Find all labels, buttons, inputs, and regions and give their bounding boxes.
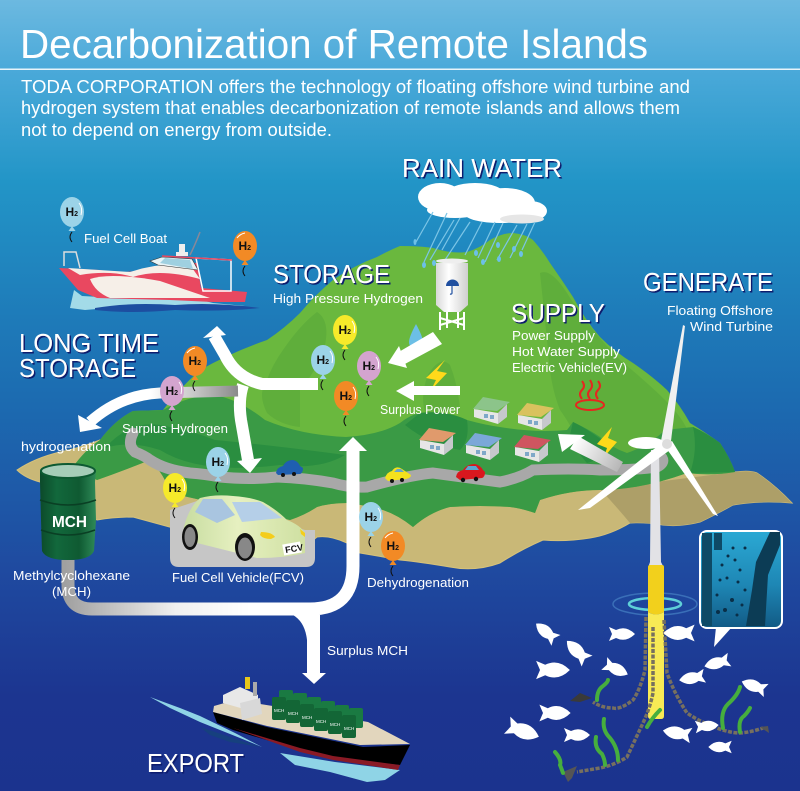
FCV plate bbox=[282, 542, 302, 555]
section headings bbox=[19, 259, 773, 778]
balloon: FCV blue bbox=[206, 447, 230, 492]
red car bbox=[456, 464, 485, 482]
water storage tank bbox=[436, 258, 468, 330]
car body bbox=[182, 495, 305, 558]
label: floating offshore wind turbine bbox=[667, 303, 773, 334]
balloon: boat orange: H2 bbox=[238, 239, 251, 253]
fuel cell boat bbox=[59, 232, 260, 312]
label: surplus power: Surplus Power bbox=[380, 402, 461, 417]
drums on deck: MCH bbox=[288, 711, 298, 716]
balloon: storage blue bbox=[311, 345, 335, 390]
rain lines bbox=[416, 212, 535, 262]
mid green slope shades bbox=[540, 272, 691, 463]
arrow: hydrogen to fuel cell boat bbox=[203, 326, 318, 384]
heading: export: EXPORT bbox=[147, 748, 244, 778]
cabin bbox=[150, 257, 198, 270]
intro text: hydrogen system that enables decarbonization of remote islands and allows them bbox=[21, 98, 680, 118]
balloon: storage blue: H2 bbox=[316, 353, 329, 367]
houses bbox=[419, 397, 554, 462]
arrow: surplus power to storage bbox=[396, 381, 460, 401]
balloon: boat orange bbox=[233, 231, 257, 276]
arrow: hydrogen to FCV bbox=[237, 385, 262, 473]
arrow: turbine to supply bbox=[558, 434, 623, 472]
label: floating offshore wind turbine: Wind Turbine bbox=[690, 319, 773, 334]
heading: supply: SUPPLY bbox=[511, 298, 605, 328]
label: methylcyclohexane: Methylcyclohexane bbox=[13, 568, 130, 583]
wheels bbox=[182, 524, 198, 550]
label: dehydrogenation: Dehydrogenation bbox=[367, 575, 469, 590]
hot spring icon bbox=[576, 380, 604, 410]
heading: long time storage line 2: STORAGE bbox=[19, 353, 136, 383]
house: red roof bbox=[514, 435, 551, 462]
balloon: boat blue bbox=[60, 197, 84, 242]
arrow: surplus hydrogen to long time storage bbox=[78, 391, 238, 432]
label: hydrogenation: hydrogenation bbox=[21, 439, 111, 454]
heading: long time storage: LONG TIME bbox=[19, 328, 159, 358]
mooring chains bbox=[577, 617, 763, 772]
label: methylcyclohexane bbox=[13, 568, 130, 599]
lightning bolt: wind supply bbox=[597, 427, 617, 457]
underwater photo callout bbox=[700, 531, 782, 647]
rain water heading: RAIN WATER bbox=[402, 153, 562, 183]
hull bbox=[213, 712, 410, 765]
balloon: dehydrogenation orange: H2 bbox=[386, 539, 399, 553]
balloon: FCV yellow: H2 bbox=[168, 481, 181, 495]
balloon: storage purple: H2 bbox=[362, 359, 375, 373]
balloon: surplus orange bbox=[183, 346, 207, 391]
water ripples bbox=[613, 593, 697, 615]
water drop icon bbox=[409, 324, 423, 349]
arrow: MCH line to storage and export bbox=[68, 437, 367, 684]
label: surplus hydrogen: Surplus Hydrogen bbox=[122, 421, 228, 436]
house: yellow roof bbox=[517, 403, 554, 430]
spray bbox=[70, 290, 245, 310]
MCH drum bbox=[40, 464, 96, 560]
title: Decarbonization of Remote Islands bbox=[20, 21, 648, 67]
heading: storage: STORAGE bbox=[273, 259, 390, 289]
balloon: FCV yellow bbox=[163, 473, 187, 518]
white flow arrows bbox=[68, 326, 623, 684]
balloon: storage yellow bbox=[333, 315, 357, 360]
drums on deck bbox=[272, 690, 363, 738]
deck bbox=[213, 700, 410, 745]
export ship bbox=[150, 677, 410, 782]
label: methylcyclohexane: (MCH) bbox=[52, 584, 91, 599]
house: green roof bbox=[473, 397, 510, 424]
house: blue roof bbox=[465, 433, 502, 460]
label: supply items bbox=[512, 328, 627, 375]
label: surplus MCH: Surplus MCH bbox=[327, 643, 408, 658]
fish school bbox=[504, 618, 769, 753]
car pad and fuel cell vehicle bbox=[170, 495, 315, 567]
balloon: dehydrogenation blue bbox=[359, 502, 383, 547]
sand beach bbox=[17, 440, 792, 569]
dark green lower band bbox=[73, 395, 735, 527]
label: supply items: Power Supply bbox=[512, 328, 596, 343]
drums on deck: MCH bbox=[316, 719, 326, 724]
headlight bbox=[260, 532, 275, 539]
house: orange roof bbox=[419, 428, 456, 455]
tower bbox=[648, 450, 664, 568]
bridge bbox=[223, 687, 258, 713]
rain cloud bbox=[414, 183, 547, 268]
drums on deck: MCH bbox=[344, 726, 354, 731]
lightning bolt: surplus power bbox=[426, 360, 447, 390]
car pad and fuel cell vehicle: FCV bbox=[284, 542, 304, 555]
label: fuel cell boat: Fuel Cell Boat bbox=[84, 231, 167, 246]
blades bbox=[661, 325, 685, 441]
concrete pad bbox=[170, 500, 315, 567]
island bbox=[17, 233, 792, 569]
yellow car bbox=[385, 467, 411, 483]
balloon: dehydrogenation blue: H2 bbox=[364, 510, 377, 524]
balloon: surplus purple: H2 bbox=[166, 384, 178, 398]
drums on deck: MCH bbox=[330, 722, 340, 727]
label: fuel cell vehicle: Fuel Cell Vehicle(FCV) bbox=[172, 570, 304, 585]
balloon: boat blue: H2 bbox=[66, 205, 78, 219]
label: supply items: Hot Water Supply bbox=[512, 344, 621, 359]
cars on road bbox=[276, 460, 485, 483]
label: floating offshore wind turbine: Floating Offshore bbox=[667, 303, 773, 318]
hydrogen balloons bbox=[60, 197, 405, 576]
seaweed bbox=[555, 680, 750, 773]
label: high pressure hydrogen: High Pressure Hydrogen bbox=[273, 291, 423, 306]
drums on deck: MCH bbox=[302, 715, 312, 720]
arrow: rain water to storage bbox=[388, 332, 442, 368]
green hillside bbox=[73, 233, 735, 527]
intro text: TODA CORPORATION offers the technology of floating offshore wind turbine and bbox=[21, 77, 690, 97]
component labels bbox=[13, 231, 773, 658]
intro text: not to depend on energy from outside. bbox=[21, 120, 332, 140]
float bbox=[648, 565, 664, 614]
balloon: storage purple bbox=[357, 351, 381, 396]
intro text bbox=[21, 77, 690, 140]
balloon: surplus orange: H2 bbox=[188, 354, 201, 368]
road bbox=[130, 433, 663, 487]
balloon: storage yellow: H2 bbox=[338, 323, 351, 337]
balloon: surplus purple bbox=[160, 376, 184, 421]
drums on deck: MCH bbox=[274, 708, 284, 713]
wake bbox=[150, 697, 262, 747]
MCH drum: MCH bbox=[52, 514, 87, 531]
balloon: storage orange: H2 bbox=[340, 389, 352, 403]
balloon: dehydrogenation orange bbox=[381, 531, 405, 576]
hull bbox=[59, 262, 247, 302]
balloon: FCV blue: H2 bbox=[212, 455, 224, 469]
heading: generate: GENERATE bbox=[643, 267, 773, 297]
floating wind turbine bbox=[578, 325, 718, 719]
label: supply items: Electric Vehicle(EV) bbox=[512, 360, 627, 375]
blue car bbox=[276, 460, 303, 477]
balloon: storage orange bbox=[334, 381, 358, 426]
anchors bbox=[563, 693, 769, 782]
